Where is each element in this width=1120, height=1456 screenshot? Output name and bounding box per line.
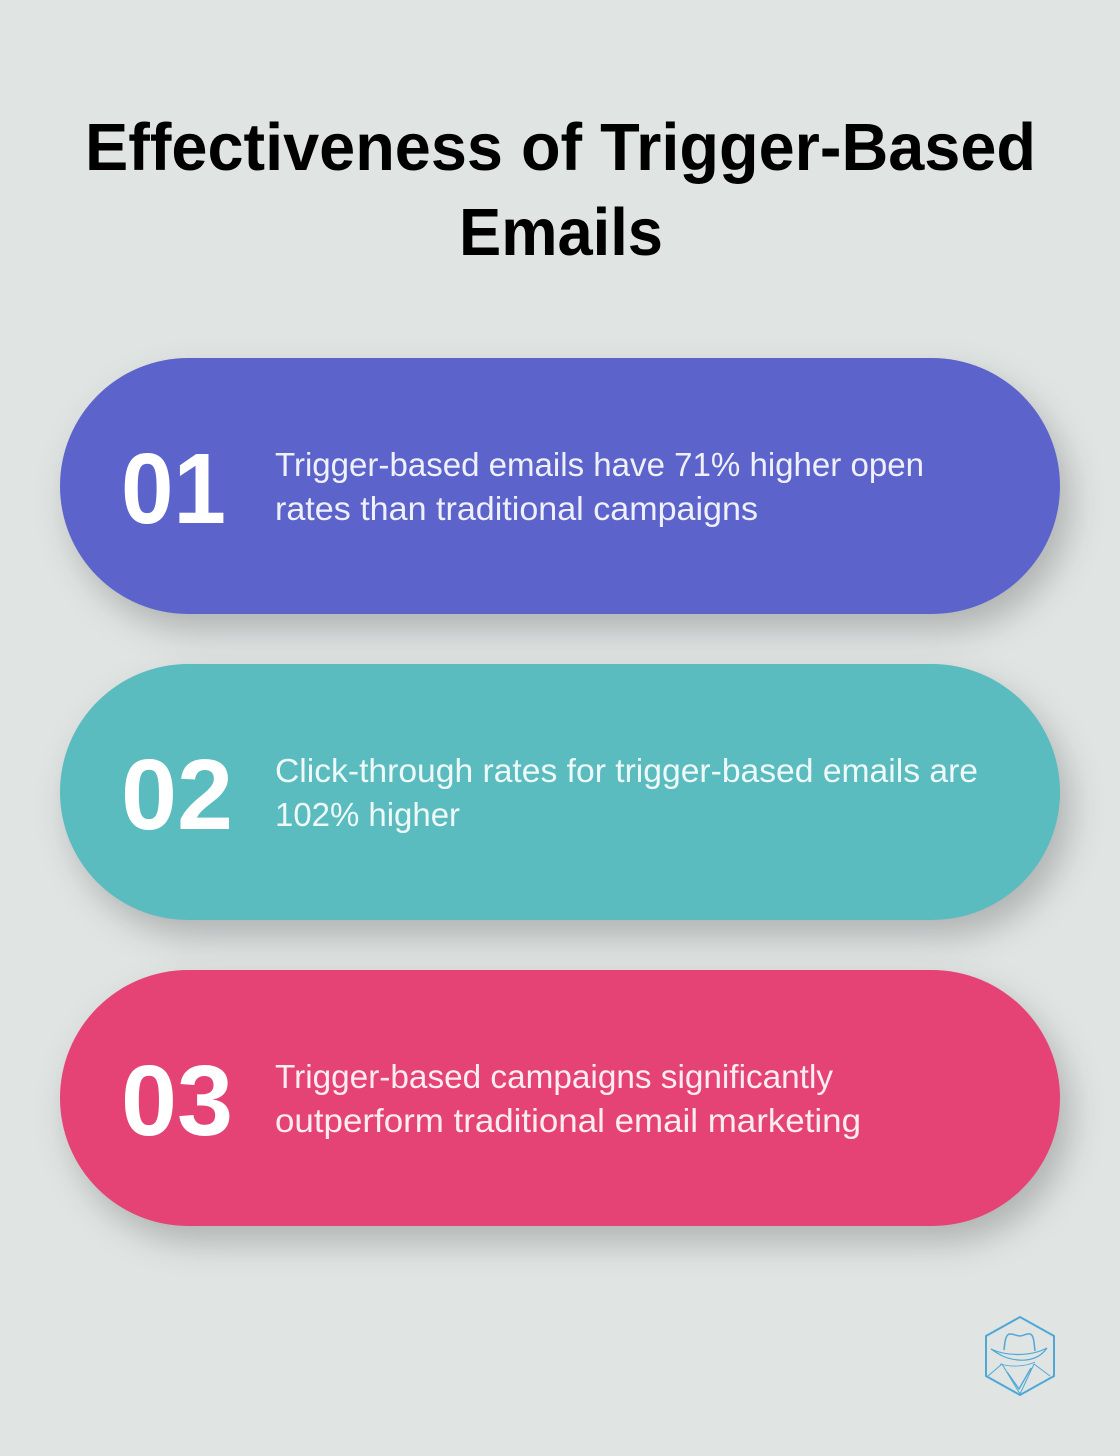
text: open rates: Trigger-based emails have 71% higher open	[275, 446, 924, 483]
number 01: 01	[121, 433, 226, 545]
icon: spy logo	[986, 1317, 1054, 1395]
panel: 03 outperform	[60, 970, 1070, 1242]
text: open rates: rates than traditional campaigns	[275, 490, 758, 527]
title: Emails	[459, 195, 663, 270]
number 03: 03	[121, 1045, 233, 1157]
title: Effectiveness of Trigger-Based	[85, 110, 1036, 185]
text: click-through rates: Click-through rates for trigger-based emails are	[275, 752, 978, 789]
panel: 02 click-through rates	[60, 664, 1070, 936]
text: outperform: Trigger-based campaigns significantly	[275, 1058, 834, 1095]
text: outperform	[275, 1058, 861, 1139]
panel: 01 open rates	[60, 358, 1070, 630]
number 02: 02	[121, 739, 233, 851]
title	[85, 110, 1036, 270]
text: outperform: outperform traditional email marketing	[275, 1102, 861, 1139]
text: click-through rates: 102% higher	[275, 796, 460, 833]
text: open rates	[275, 446, 924, 527]
text: click-through rates	[275, 752, 978, 833]
